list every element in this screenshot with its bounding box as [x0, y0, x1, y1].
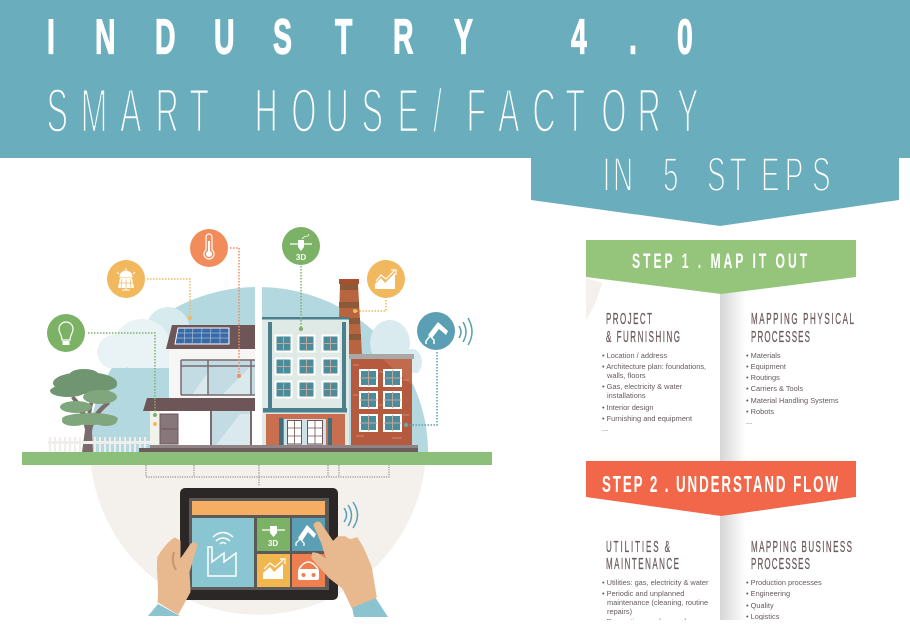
door	[160, 414, 178, 444]
list: business processes: • Quality	[746, 601, 774, 610]
cloud right	[370, 320, 422, 375]
list: project: walls, floors	[606, 371, 646, 380]
ground	[22, 452, 492, 465]
subtitle: In 5 Steps: IN5STEPS	[603, 148, 831, 202]
step 2 banner	[586, 461, 856, 516]
list: business processes	[746, 578, 822, 621]
cloud left	[97, 307, 190, 374]
list: project: • Interior design	[602, 403, 653, 412]
list: physical processes: • Carriers & Tools	[746, 384, 803, 393]
icon: robot arm	[417, 312, 455, 350]
list: utilities	[602, 580, 708, 620]
list: business processes: • Engineering	[746, 589, 790, 598]
list: physical processes: • Materials	[746, 351, 781, 360]
list: business processes: • Logistics	[746, 612, 780, 621]
icon: tablet waves	[344, 502, 358, 528]
icon: thermometer	[190, 229, 228, 267]
list: utilities: • Reparations and upgrades	[602, 617, 694, 626]
connector dots	[153, 309, 408, 427]
icon: wireless waves	[459, 318, 472, 345]
connectors	[88, 248, 437, 425]
brick windows	[360, 370, 401, 431]
underground wiring	[146, 465, 389, 486]
tablet	[180, 488, 338, 600]
list: physical processes	[746, 351, 839, 426]
list: physical processes: • Routings	[746, 373, 780, 382]
title: Industry 4.0: INDUSTRY4.0	[47, 11, 693, 65]
step 2 right column: MAPPING BUSINESS	[751, 538, 852, 556]
list: physical processes: • Robots	[746, 407, 774, 416]
right hand	[312, 522, 388, 617]
chimney	[338, 279, 362, 355]
tile: 3D printing	[257, 518, 290, 551]
subtitle: Smart House/Factory: SMARTHOUSE/FACTORY	[46, 77, 699, 146]
awning	[143, 398, 255, 411]
corner accent	[586, 278, 602, 320]
factory windows	[276, 336, 338, 398]
upper window	[181, 360, 255, 395]
left hand	[148, 538, 197, 616]
list: utilities: • Utilities: gas, electricity & water	[602, 578, 709, 587]
list: utilities: • Periodic and unplanned	[602, 589, 684, 598]
factory doors	[279, 418, 332, 445]
list: physical processes: • Equipment	[746, 362, 786, 371]
list: project: • Location / address	[602, 351, 667, 360]
list: project: installations	[607, 391, 646, 400]
list: project: ...	[602, 424, 608, 433]
centre gap	[255, 285, 262, 452]
step 1 left column: & FURNISHING	[606, 328, 680, 346]
step 2 left column: UTILITIES &	[606, 538, 670, 556]
step 1 left column	[602, 310, 706, 433]
tile: chart	[257, 554, 290, 587]
step 1 right column	[746, 310, 854, 426]
list: business processes: • Production processes	[746, 578, 822, 587]
icon: 3D printer	[282, 227, 320, 265]
factory building	[262, 317, 349, 445]
tree	[50, 369, 118, 452]
step 1 left column: PROJECT	[606, 310, 652, 328]
tile: VR headset	[292, 554, 325, 587]
step 1 banner: STEP 1 . MAP IT OUT	[632, 248, 808, 273]
step shadows	[720, 285, 746, 620]
solar panel	[175, 328, 229, 344]
step 2 left column: MAINTENANCE	[606, 555, 679, 573]
icon: growth chart	[367, 260, 405, 298]
background circle: sky	[88, 287, 428, 452]
icon: solar	[107, 260, 145, 298]
background circle: cream	[91, 465, 425, 615]
list: project: • Furnishing and equipment	[602, 414, 692, 423]
base slab	[139, 445, 418, 452]
step 1 right column: PROCESSES	[751, 328, 810, 346]
icon: light bulb	[47, 314, 85, 352]
step 2 left column	[602, 540, 708, 620]
brick building	[349, 354, 414, 445]
list: project: • Gas, electricity & water	[602, 382, 683, 391]
step 2 right column	[746, 538, 852, 621]
list: physical processes: ...	[746, 417, 752, 426]
list: physical processes: • Material Handling Systems	[746, 396, 839, 405]
list: project: • Architecture plan: foundations,	[602, 362, 706, 371]
step 2 banner: STEP 2 . UNDERSTAND FLOW	[602, 471, 838, 497]
icon: 3D printer: 3D	[296, 253, 306, 262]
house	[143, 325, 255, 445]
tablet top bar	[192, 501, 325, 515]
tile: smart factory	[192, 518, 254, 587]
tile: robot	[292, 518, 325, 551]
header banner	[0, 0, 910, 226]
step 1 banner	[586, 240, 856, 294]
list: project	[602, 351, 706, 433]
list: utilities: maintenance (cleaning, routine	[607, 598, 708, 607]
list: utilities: repairs)	[607, 607, 632, 616]
step 2 right column: PROCESSES	[751, 555, 810, 573]
tile: 3D printing: 3D	[268, 539, 278, 548]
step 1 right column: MAPPING PHYSICAL	[751, 310, 854, 328]
fence	[48, 437, 150, 452]
lower window	[211, 411, 251, 445]
